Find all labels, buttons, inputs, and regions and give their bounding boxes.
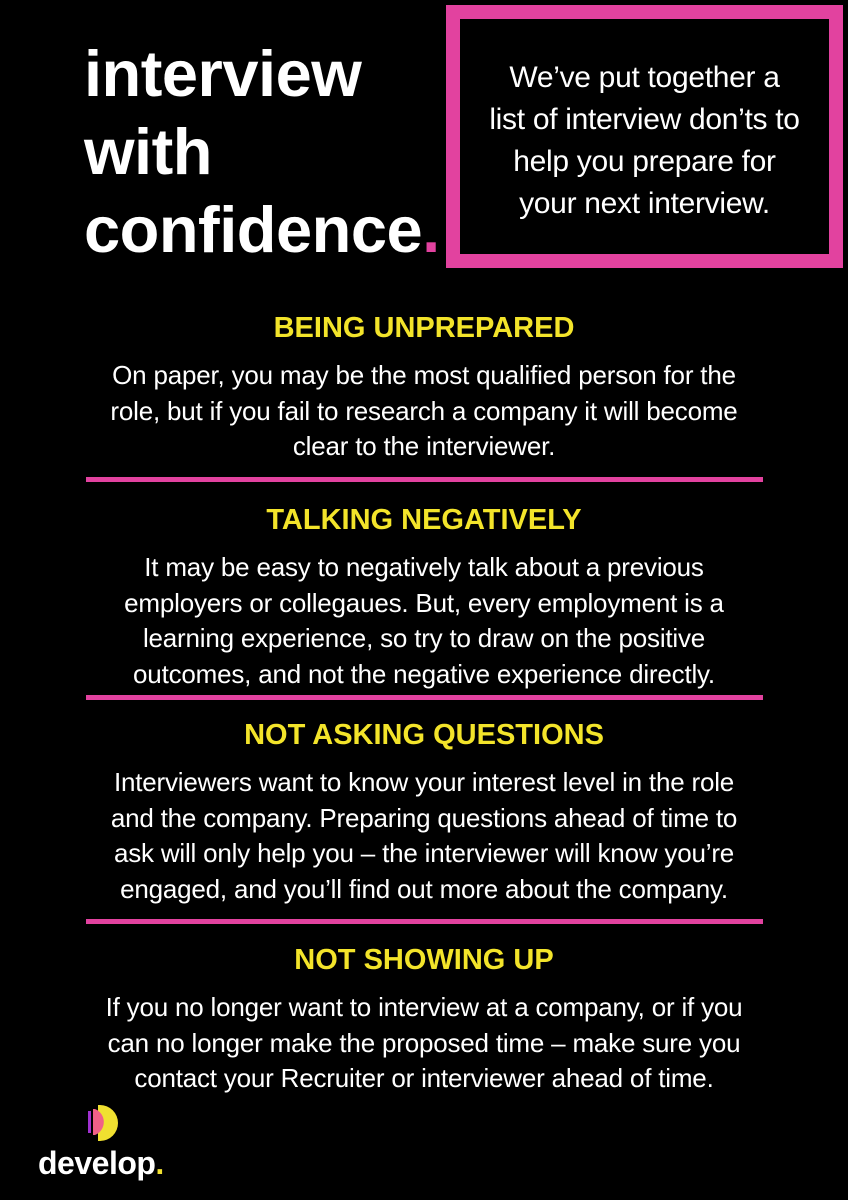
section: being unprepared: role, but if you fail to research a company it will become	[110, 396, 738, 426]
section: not asking questions: NOT ASKING QUESTIONS	[244, 719, 604, 751]
intro box: list of interview don’ts to	[489, 102, 800, 136]
section: not asking questions: engaged, and you’ll find out more about the company.	[120, 874, 728, 904]
section: being unprepared: BEING UNPREPARED	[274, 312, 574, 344]
section: talking negatively: employers or collegaues. But, every employment is a	[124, 588, 724, 618]
logo	[38, 1105, 164, 1181]
title	[84, 37, 440, 266]
section: not asking questions: and the company. Preparing questions ahead of time to	[111, 802, 737, 832]
section: not showing up	[106, 944, 742, 1093]
section: being unprepared: On paper, you may be the most qualified person for the	[112, 360, 736, 390]
intro box: We’ve put together a	[509, 60, 780, 94]
intro box: help you prepare for	[513, 144, 776, 178]
section: not asking questions	[111, 719, 737, 904]
section: not asking questions: ask will only help you – the interviewer will know you’re	[114, 838, 734, 868]
section: being unprepared	[110, 312, 738, 461]
section: not showing up: NOT SHOWING UP	[294, 944, 554, 976]
intro box: your next interview.	[519, 186, 770, 220]
title: confidence.	[84, 193, 440, 266]
section: talking negatively: TALKING NEGATIVELY	[266, 504, 582, 536]
section: not asking questions: Interviewers want to know your interest level in the role	[114, 767, 734, 797]
section: talking negatively	[124, 504, 724, 688]
icon: logo mark	[88, 1105, 118, 1141]
section: talking negatively: outcomes, and not the negative experience directly.	[133, 658, 715, 688]
section: not showing up: If you no longer want to interview at a company, or if you	[106, 992, 742, 1022]
section: not showing up: can no longer make the proposed time – make sure you	[108, 1028, 740, 1058]
section: talking negatively: It may be easy to negatively talk about a previous	[144, 552, 704, 582]
section: not showing up: contact your Recruiter or interviewer ahead of time.	[134, 1063, 714, 1093]
intro box	[446, 5, 843, 268]
section: being unprepared: clear to the interviewer.	[293, 431, 555, 461]
title: interview	[84, 37, 361, 110]
title: with	[84, 115, 212, 188]
section: talking negatively: learning experience, so try to draw on the positive	[143, 623, 705, 653]
logo text: develop.	[38, 1145, 164, 1181]
